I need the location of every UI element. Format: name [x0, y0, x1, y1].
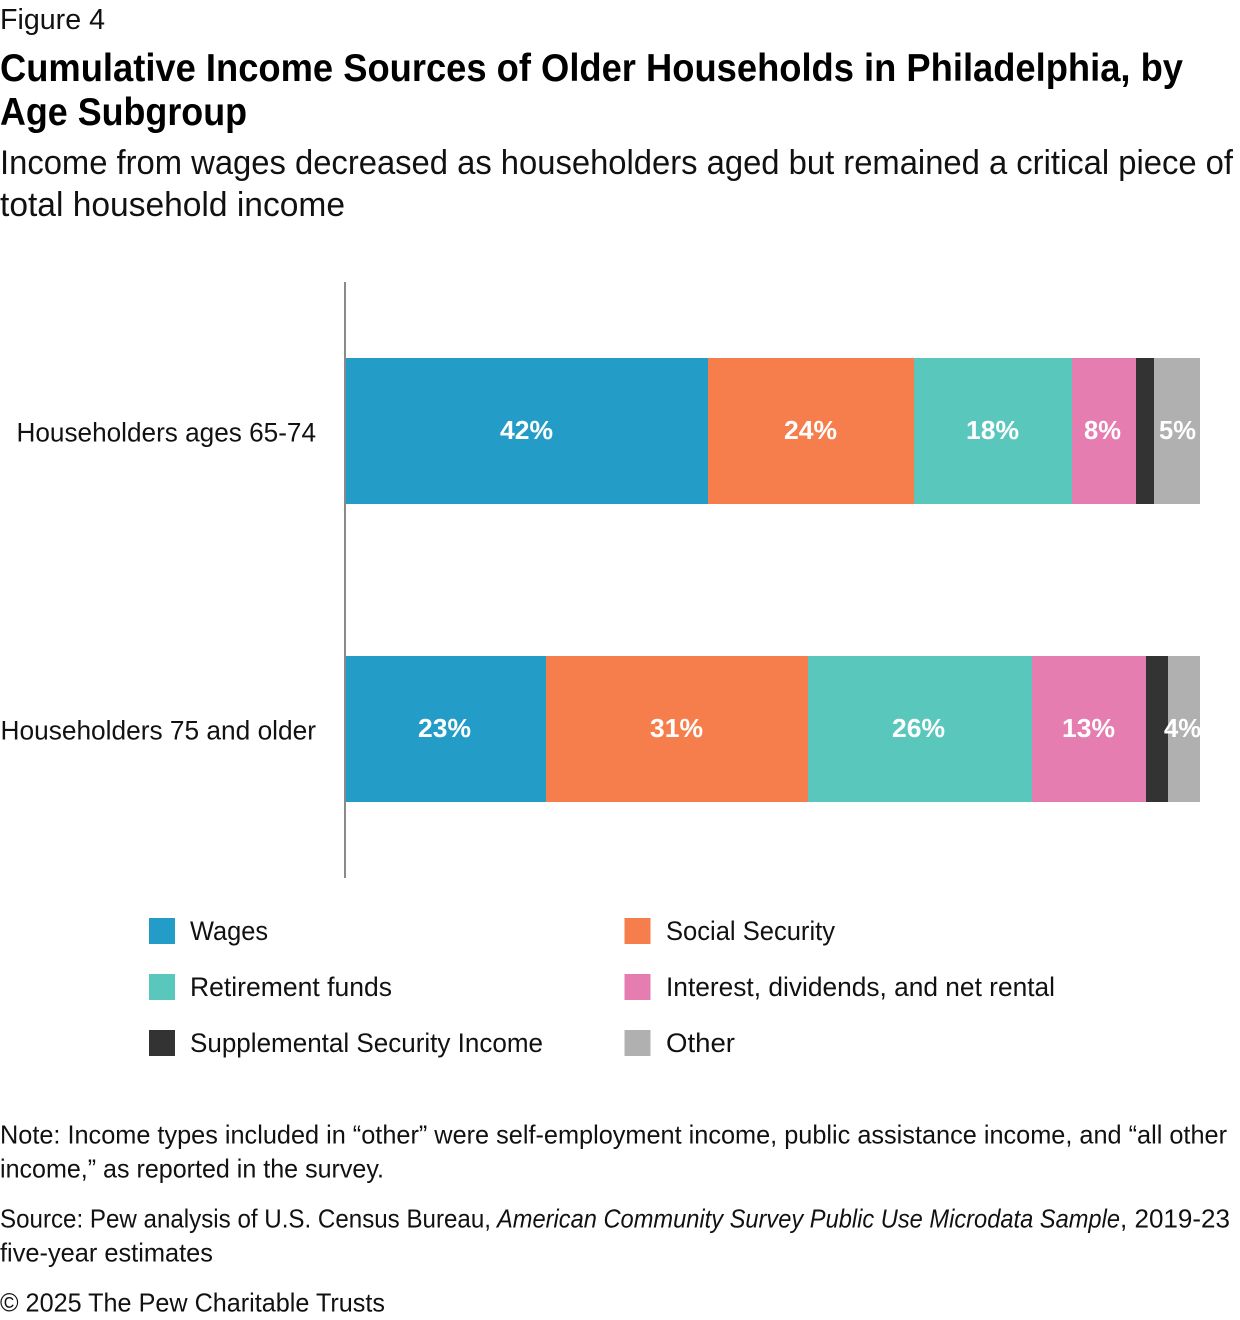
source: Source: Pew analysis of U.S. Census Bureau, — [0, 1204, 491, 1234]
legend item: other: Other — [666, 1028, 735, 1058]
bar: householders ages 65-74: 24% — [784, 415, 837, 445]
bar: householders 75 and older: 4% — [1164, 713, 1201, 743]
copyright: © 2025 The Pew Charitable Trusts — [0, 1288, 385, 1318]
figure label: Figure 4 — [0, 4, 105, 36]
bar: householders ages 65-74: 8% — [1084, 415, 1121, 445]
source — [0, 1204, 1230, 1268]
legend item: wages — [149, 916, 268, 946]
bar: householders ages 65-74: 5% — [1159, 415, 1196, 445]
subtitle: total household income — [0, 186, 345, 224]
legend item: other — [624, 1028, 735, 1058]
row label: householders ages 65-74: Householders ages 65-74 — [16, 418, 316, 448]
bar: householders 75 and older: 26% — [892, 713, 945, 743]
legend item: social security: Social Security — [666, 916, 835, 946]
bar: householders 75 and older: 31% — [650, 713, 703, 743]
source: American Community Survey Public Use Microdata Sample — [495, 1204, 1120, 1234]
row label: householders 75 and older: Householders 75 and older — [0, 716, 316, 746]
title — [0, 47, 1183, 134]
bar: householders 75 and older: 13% — [1062, 713, 1115, 743]
legend item: interest, dividends, and net rental: Interest, dividends, and net rental — [666, 972, 1055, 1002]
legend — [149, 916, 1055, 1058]
axis line — [344, 282, 346, 878]
legend item: supplemental security income: Supplemental Security Income — [190, 1028, 543, 1058]
bar: householders ages 65-74: 18% — [966, 415, 1019, 445]
source: , 2019-23 — [1120, 1204, 1230, 1234]
title: Cumulative Income Sources of Older Households in Philadelphia, by — [0, 47, 1183, 90]
note: income,” as reported in the survey. — [0, 1154, 384, 1184]
note — [0, 1120, 1227, 1184]
bar: householders 75 and older: 23% — [418, 713, 471, 743]
source: five-year estimates — [0, 1238, 213, 1268]
legend item: wages: Wages — [190, 916, 268, 946]
title: Age Subgroup — [0, 91, 247, 134]
bar: householders ages 65-74 — [345, 358, 1200, 504]
chart: stacked bars — [0, 282, 1201, 878]
bar: householders 75 and older — [345, 656, 1201, 802]
bar: householders ages 65-74: 42% — [500, 415, 553, 445]
legend item: retirement funds: Retirement funds — [190, 972, 392, 1002]
note: Note: Income types included in “other” were self-employment income, public assistance income, and “all other — [0, 1120, 1227, 1150]
subtitle — [0, 144, 1234, 224]
